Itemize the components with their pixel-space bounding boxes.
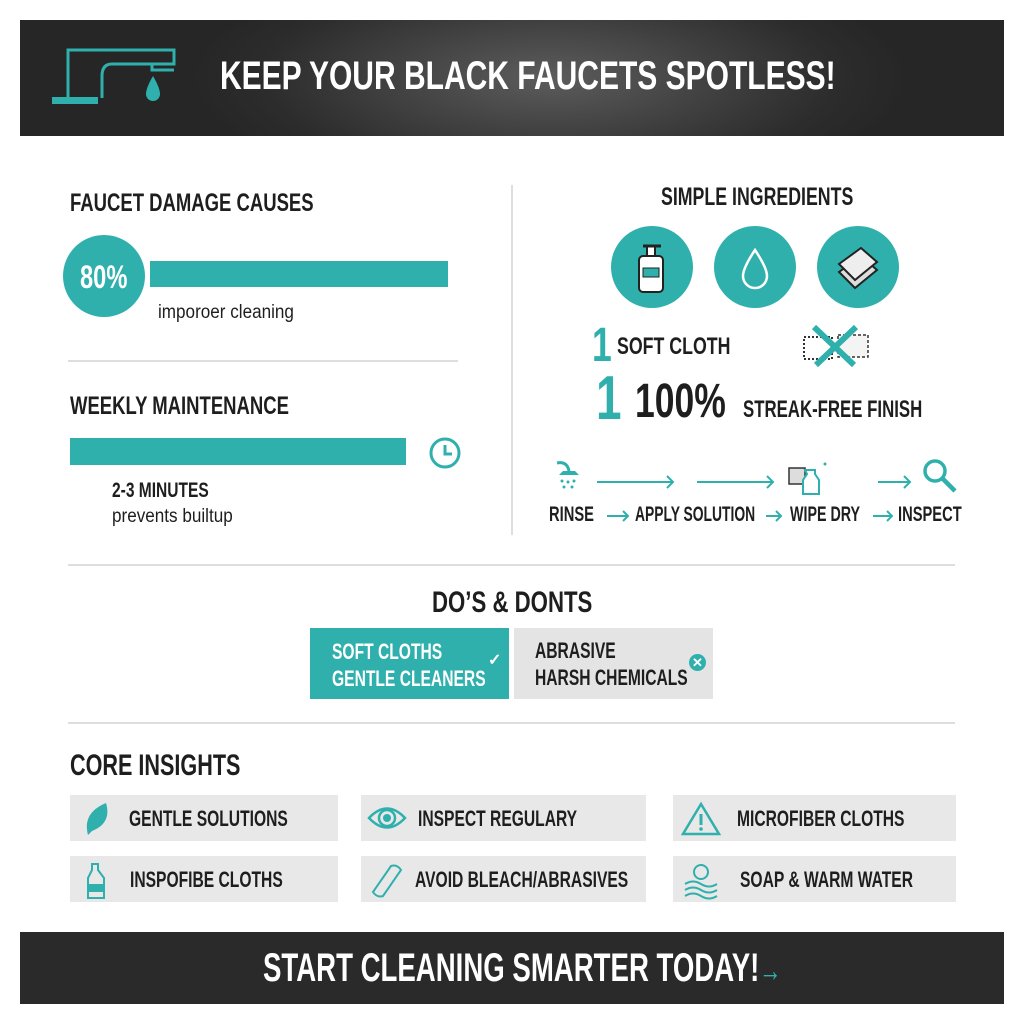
panel: faucet damage causes: imporoer cleaning: [158, 302, 294, 323]
panel: do's and don'ts: [310, 586, 713, 699]
icon: cloth: [817, 226, 899, 308]
panel: do's and don'ts: DO’S & DONTS: [432, 586, 592, 619]
80% circle: 80%: [80, 259, 127, 295]
icon: no abrasive pads: [803, 324, 869, 368]
card: gentle solutions: [70, 795, 338, 841]
don't box: ✕: [692, 655, 703, 670]
icon: soap bottle: [611, 226, 693, 308]
icon: shower: [556, 461, 579, 488]
card: microfiber cloths: MICROFIBER CLOTHS: [737, 806, 904, 831]
step labels: RINSE: [549, 503, 594, 526]
card: gentle solutions: GENTLE SOLUTIONS: [129, 806, 288, 831]
do box: SOFT CLOTHS: [332, 639, 442, 664]
80% circle: [63, 235, 145, 317]
footer bar: [20, 932, 1004, 1004]
bar: [150, 261, 448, 287]
panel: weekly maintenance: prevents builtup: [112, 506, 233, 527]
card: avoid bleach: [361, 856, 646, 902]
card: soap & warm water: [673, 856, 956, 902]
panel: simple ingredients: STREAK-FREE FINISH: [743, 396, 922, 423]
panel: simple ingredients: SOFT CLOTH: [617, 333, 730, 360]
panel: weekly maintenance: 2-3 MINUTES: [112, 479, 209, 502]
panel: faucet damage causes: [63, 189, 448, 323]
title: KEEP YOUR BLACK FAUCETS SPOTLESS!: [220, 54, 836, 98]
panel: simple ingredients: 1: [592, 319, 612, 372]
card: avoid bleach: AVOID BLEACH/ABRASIVES: [415, 867, 628, 892]
panel: simple ingredients: 1: [596, 364, 622, 433]
step labels: INSPECT: [898, 503, 962, 526]
arrows: [597, 475, 912, 489]
header bar: [20, 20, 1004, 136]
step labels: APPLY SOLUTION: [635, 503, 755, 526]
step labels: WIPE DRY: [790, 503, 860, 526]
icon: spray: [788, 462, 826, 495]
do box: GENTLE CLEANERS: [332, 666, 486, 691]
panel: simple ingredients: SIMPLE INGREDIENTS: [661, 183, 853, 211]
don't box: [514, 628, 713, 699]
icon: magnifier: [923, 459, 956, 493]
icon: water drop: [714, 226, 796, 308]
card: inspofibe cloths: [70, 856, 338, 902]
process flow: [549, 459, 962, 526]
panel: simple ingredients: [592, 183, 922, 433]
card: soap & warm water: SOAP & WARM WATER: [740, 867, 913, 892]
footer bar: START CLEANING SMARTER TODAY!→: [263, 946, 781, 990]
do box: [310, 628, 509, 699]
icon: faucet: [52, 48, 176, 104]
do box: ✓: [488, 652, 501, 669]
card: inspect regulary: INSPECT REGULARY: [418, 806, 577, 831]
don't box: ABRASIVE: [535, 638, 616, 663]
card: inspofibe cloths: INSPOFIBE CLOTHS: [130, 867, 283, 892]
step labels: [549, 503, 962, 526]
panel: weekly maintenance: WEEKLY MAINTENANCE: [70, 392, 289, 420]
panel: faucet damage causes: FAUCET DAMAGE CAUSES: [70, 189, 314, 217]
panel: weekly maintenance: [70, 392, 460, 527]
card: inspect regulary: [361, 795, 646, 841]
panel: simple ingredients: 100%: [635, 375, 726, 428]
card: microfiber cloths: [673, 795, 956, 841]
don't box: HARSH CHEMICALS: [535, 665, 688, 690]
heading: core insights: CORE INSIGHTS: [70, 749, 240, 782]
icon: clock: [430, 438, 460, 468]
